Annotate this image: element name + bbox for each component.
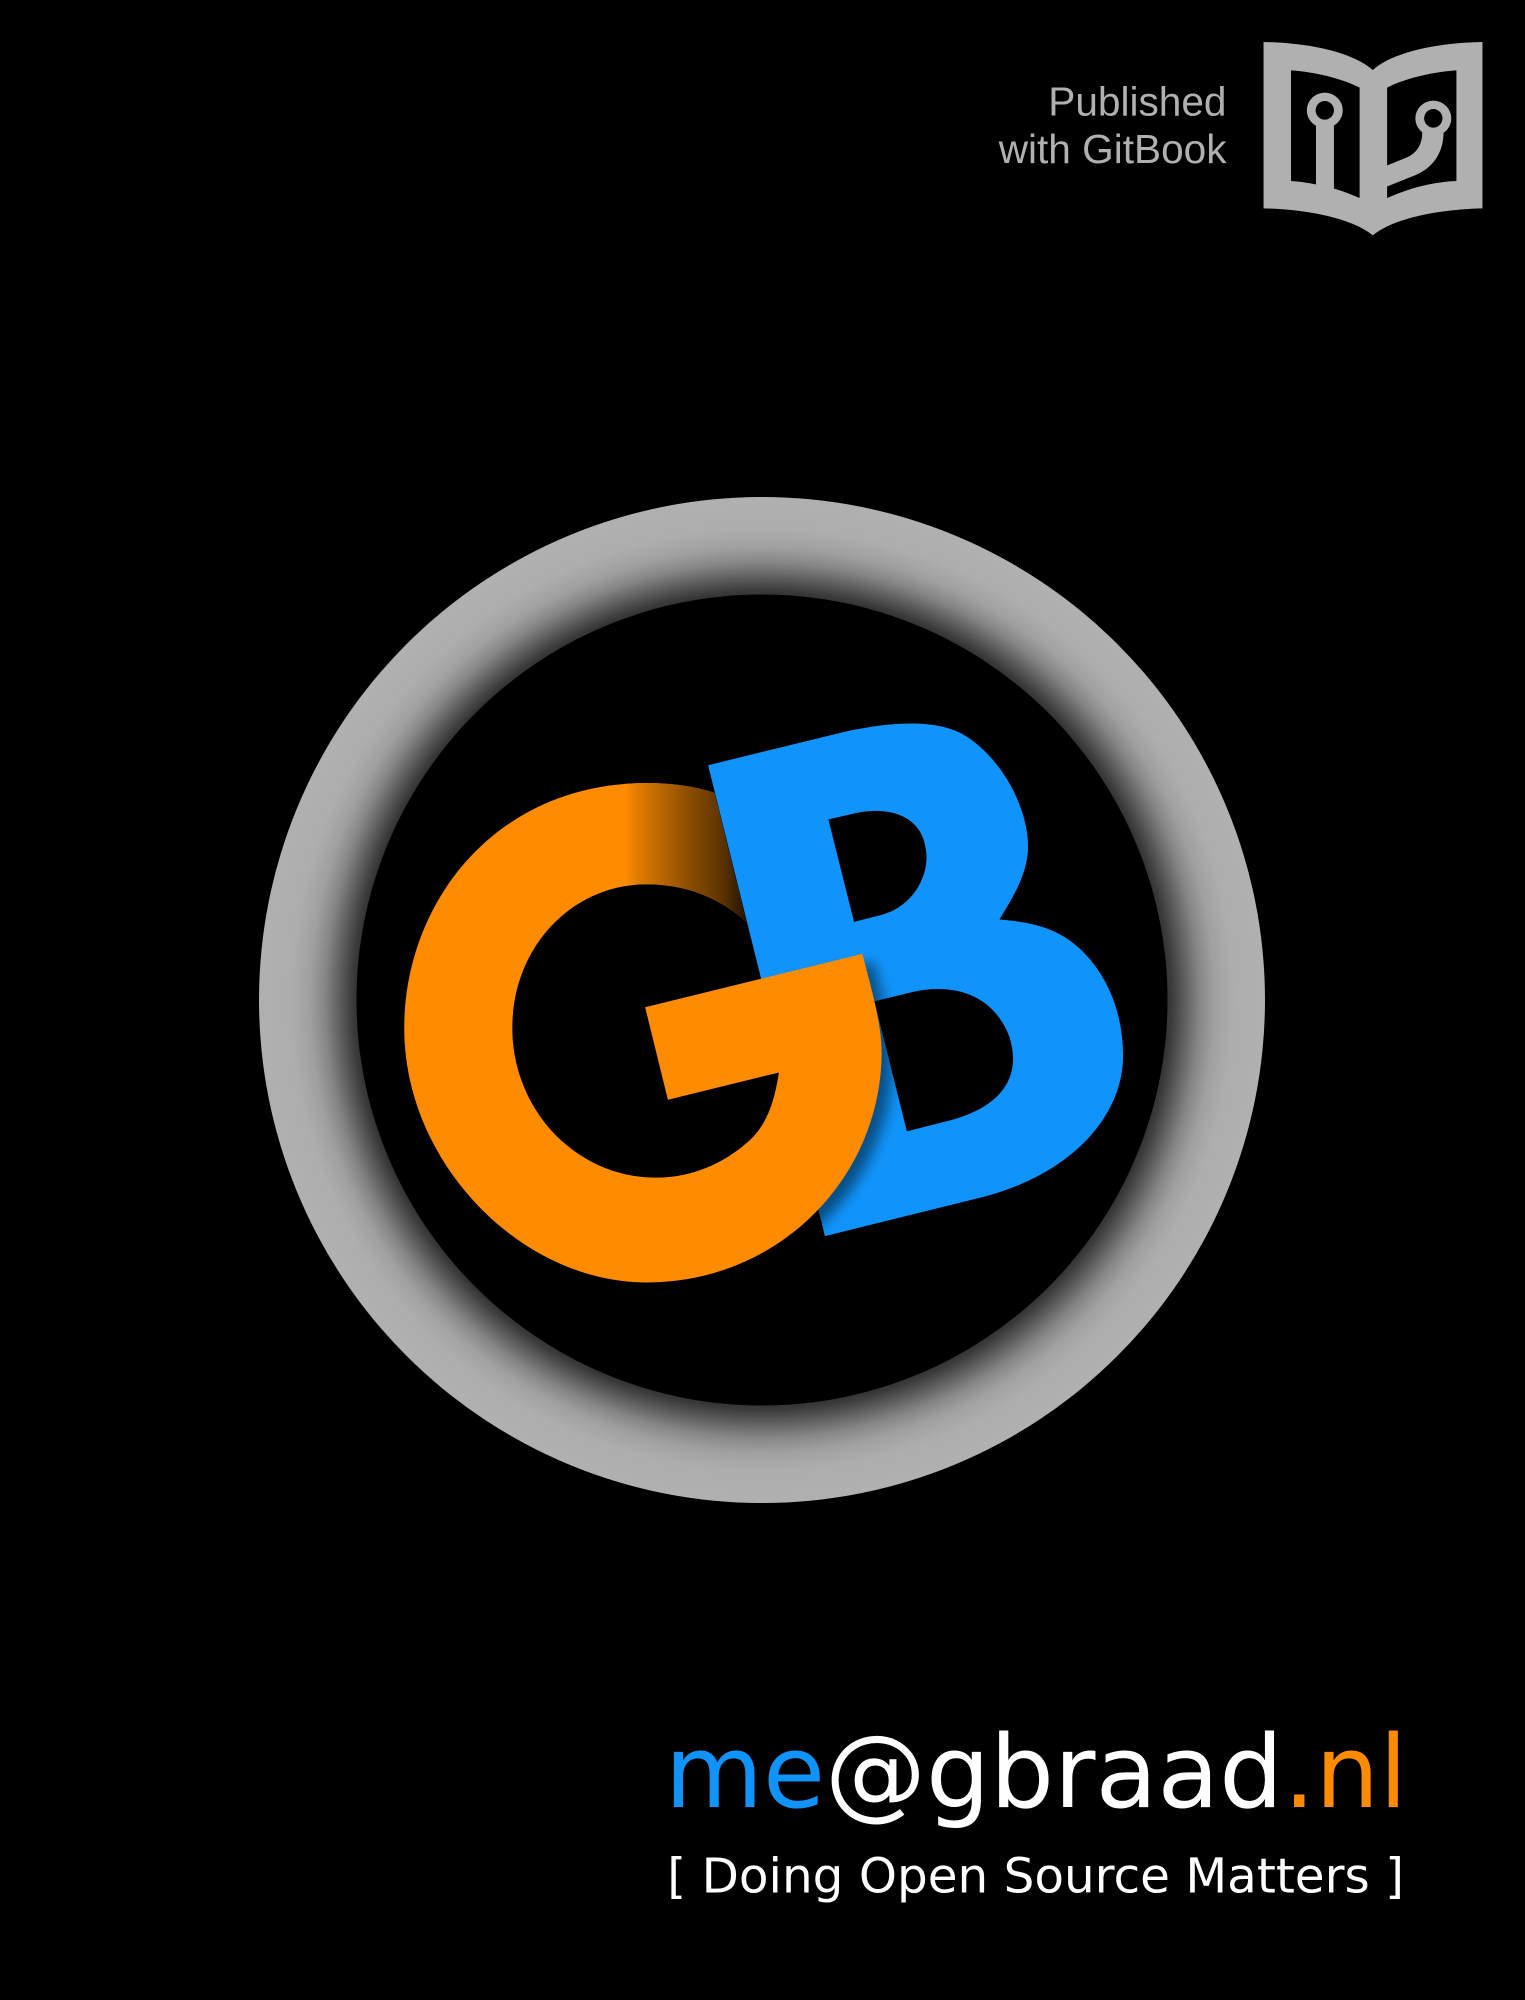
published with gitbook text: Published bbox=[1048, 78, 1226, 124]
tagline: [ Doing Open Source Matters ] bbox=[667, 1848, 1404, 1904]
letter B bbox=[708, 723, 1123, 1236]
shadow of G on B bbox=[818, 956, 898, 1233]
icon: open book with circuit traces bbox=[1264, 42, 1482, 235]
letter G bbox=[404, 783, 882, 1282]
GB monogram bbox=[404, 723, 1123, 1290]
contact email: me@gbraad.nl bbox=[665, 1713, 1407, 1831]
darkened tip of G bbox=[625, 779, 751, 925]
logo ring bbox=[259, 497, 1265, 1503]
published with gitbook text: with GitBook bbox=[998, 126, 1227, 172]
publisher badge bbox=[998, 42, 1482, 235]
published with gitbook text bbox=[998, 78, 1227, 172]
cover page bbox=[259, 42, 1482, 1902]
